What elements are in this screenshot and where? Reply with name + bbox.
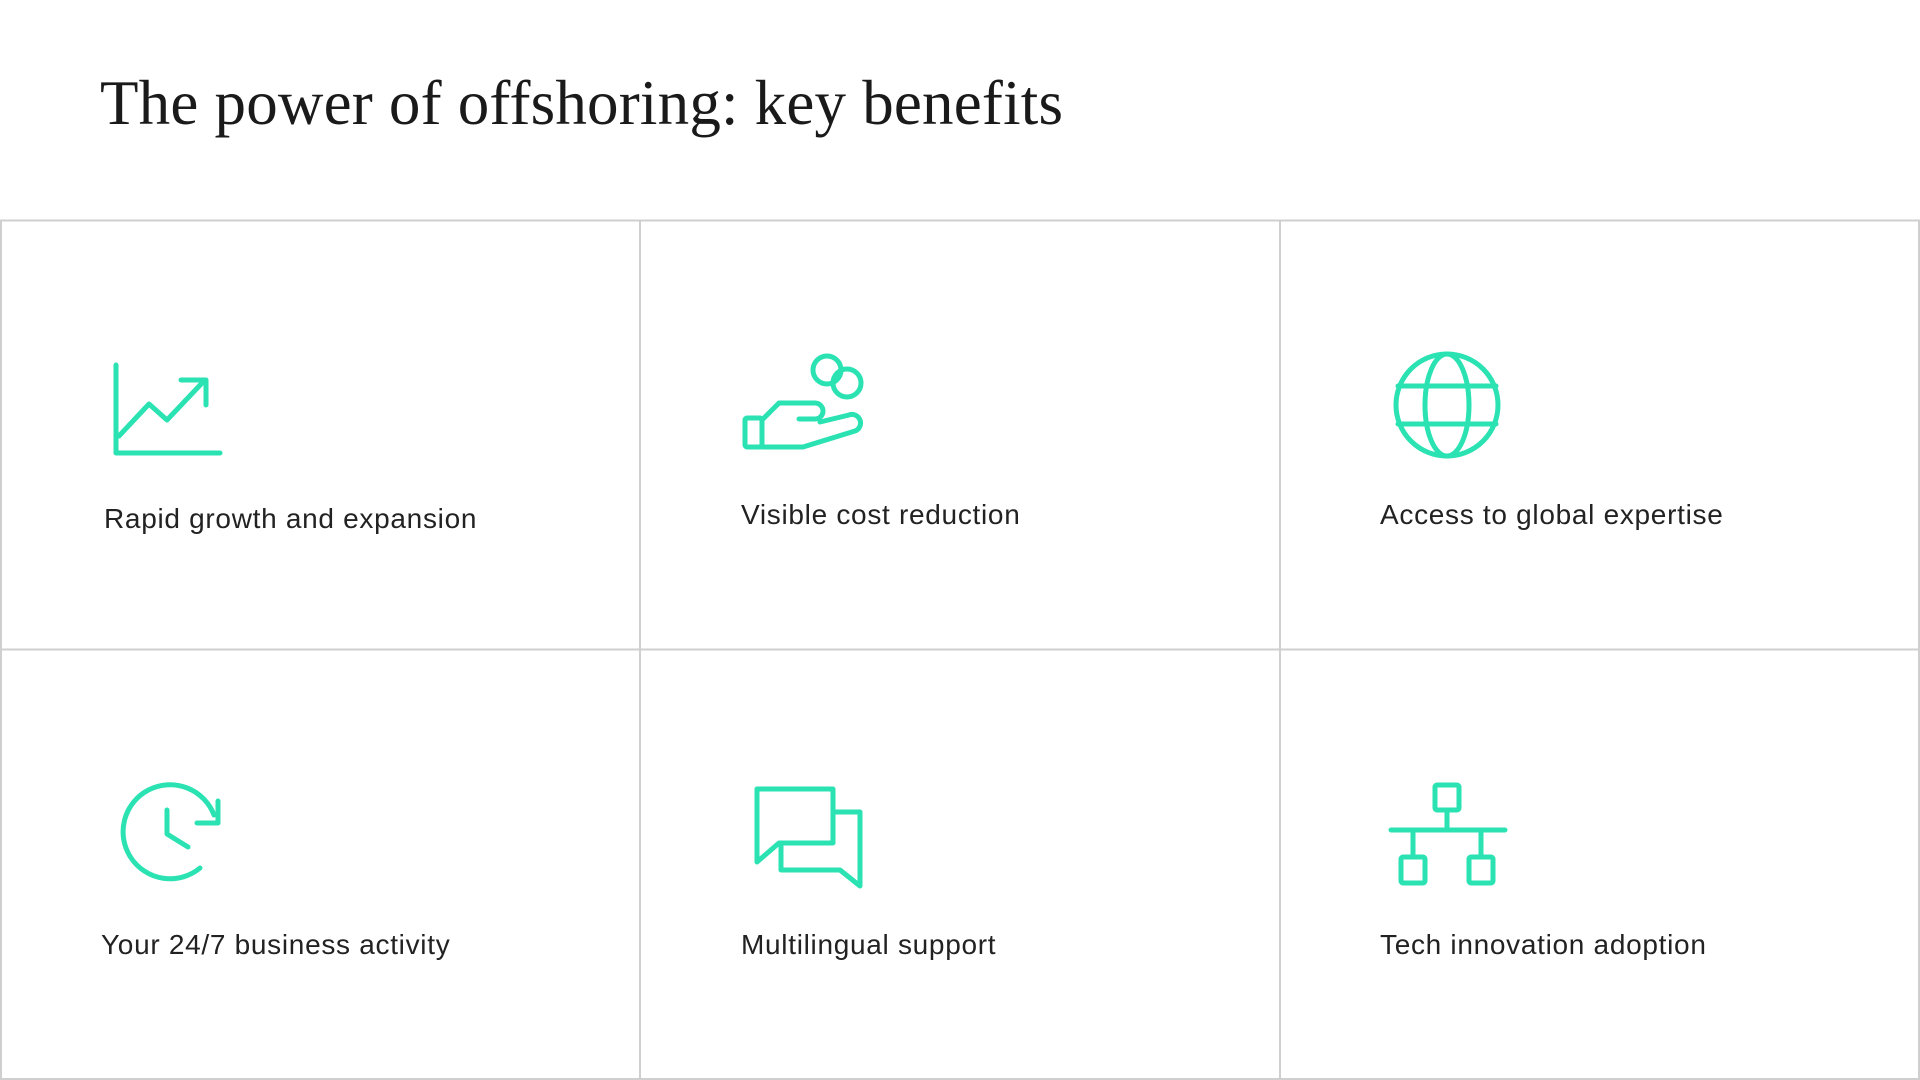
icon: clock (120, 782, 220, 882)
icon: globe (1394, 352, 1500, 458)
text: multilingual: Multilingual support (741, 929, 996, 960)
title: The power of offshoring: key benefits (100, 68, 1063, 138)
icon: growth chart (114, 362, 222, 456)
text: global: Access to global expertise (1380, 499, 1723, 530)
icon: chat (754, 786, 862, 888)
text: 24/7: Your 24/7 business activity (101, 929, 450, 960)
text: growth: Rapid growth and expansion (104, 503, 477, 534)
text: cost: Visible cost reduction (741, 499, 1020, 530)
icon: network (1388, 782, 1508, 886)
icon: hand with coins (742, 354, 864, 450)
text: tech: Tech innovation adoption (1380, 929, 1707, 960)
